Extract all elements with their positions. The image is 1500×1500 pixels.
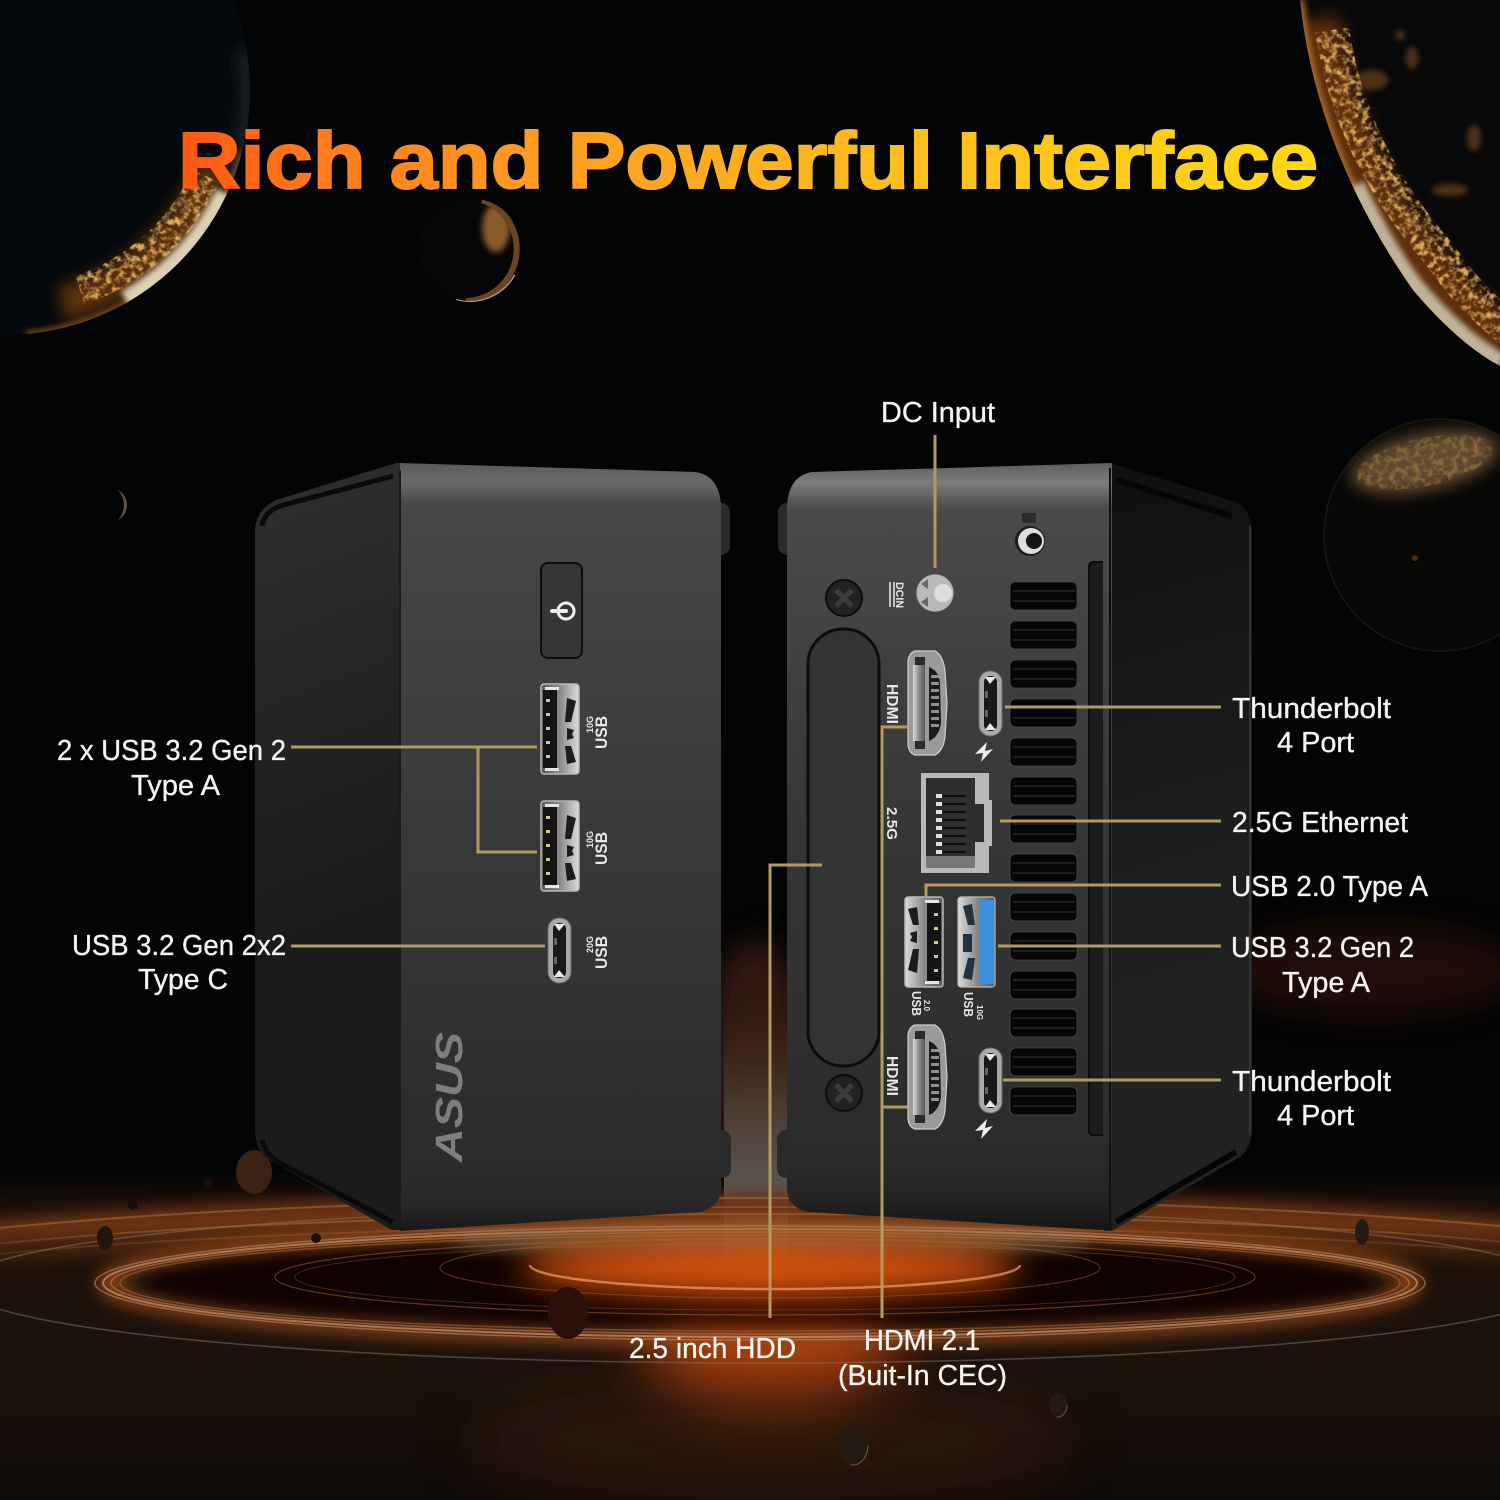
label: USB 3.2 Gen 2 Type A — [1231, 932, 1414, 999]
front face — [400, 463, 721, 1231]
DC IN marking: DCIN — [893, 582, 905, 608]
rear markings: HDMI — [883, 684, 900, 724]
label: Thunderbolt 4 Port (upper) — [1232, 693, 1391, 759]
label: HDMI 2.1 Built-In CEC: HDMI 2.1 — [864, 1325, 980, 1357]
Thunderbolt icons — [975, 742, 993, 1139]
side face — [255, 463, 402, 1230]
planet: dim lower right — [1220, 925, 1500, 1015]
connector lines — [291, 435, 1221, 1318]
label: 2.5 inch HDD: 2.5 inch HDD — [629, 1333, 796, 1365]
Ethernet port — [921, 773, 992, 873]
label: USB 3.2 Gen 2 Type A: USB 3.2 Gen 2 — [1231, 932, 1414, 964]
USB port markings — [585, 716, 611, 969]
USB port markings: USB — [592, 832, 611, 865]
audio jack — [1015, 513, 1045, 556]
DC input jack — [916, 574, 954, 612]
rubber feet — [712, 503, 731, 1178]
horizon streaks — [0, 1183, 1500, 1266]
Thunderbolt ports — [979, 671, 1002, 1113]
HDMI ports — [908, 651, 947, 1129]
rear markings: USB — [909, 991, 924, 1016]
planet: faint small left — [118, 490, 127, 520]
side face — [1104, 463, 1252, 1231]
USB port markings: 10G — [585, 716, 595, 733]
device: left, front panel side — [255, 463, 731, 1231]
USB 2.0 port — [905, 897, 943, 987]
rear markings: 10G — [975, 1005, 984, 1020]
planet: right — [1324, 419, 1500, 651]
label: USB 3.2 Gen 2 Type A: Type A — [1282, 967, 1371, 999]
rear markings: 2.5G — [883, 807, 900, 840]
USB 3.2 blue port — [958, 897, 995, 987]
floor glow — [0, 940, 1500, 1500]
orbit rings — [95, 1226, 1425, 1340]
label: 2.5G Ethernet: 2.5G Ethernet — [1232, 807, 1408, 839]
label: DC Input: DC Input — [881, 397, 995, 429]
label: Thunderbolt 4 Port (lower): 4 Port — [1277, 1100, 1354, 1132]
rubber feet — [777, 503, 796, 1178]
label: 2 x USB 3.2 Gen 2 Type A: Type A — [131, 770, 221, 802]
USB port markings: USB — [592, 936, 611, 969]
label: USB 3.2 Gen 2x2 Type C — [72, 930, 286, 996]
label: HDMI 2.1 Built-In CEC — [838, 1325, 1007, 1392]
vents — [1010, 582, 1077, 1115]
small planets along the orbit — [97, 1150, 1369, 1465]
label: 2 x USB 3.2 Gen 2 Type A: 2 x USB 3.2 Gen 2 — [57, 735, 286, 767]
power button — [541, 563, 582, 658]
rear markings: 2.0 — [922, 1000, 931, 1012]
USB port markings: 10G — [585, 831, 595, 848]
label: HDMI 2.1 Built-In CEC: (Buit-In CEC) — [838, 1360, 1007, 1392]
planet: top right — [1300, 0, 1500, 366]
expansion slot edge — [1089, 562, 1103, 1135]
device: right, rear panel side — [777, 463, 1252, 1231]
USB-A ports — [541, 684, 579, 891]
label: Thunderbolt 4 Port (lower) — [1232, 1066, 1391, 1132]
planet: small moon — [456, 200, 520, 302]
label: USB 2.0 Type A: USB 2.0 Type A — [1231, 871, 1429, 903]
label: 2 x USB 3.2 Gen 2 Type A — [57, 735, 286, 802]
USB-C port — [548, 918, 571, 983]
label: USB 3.2 Gen 2x2 Type C: USB 3.2 Gen 2x2 — [72, 930, 286, 962]
HDD door — [808, 629, 879, 1066]
label: Thunderbolt 4 Port (upper): Thunderbolt — [1232, 693, 1391, 725]
screws — [826, 580, 862, 1111]
USB port markings: USB — [592, 716, 611, 749]
label: Thunderbolt 4 Port (lower): Thunderbolt — [1232, 1066, 1391, 1098]
rear markings: USB — [961, 992, 976, 1017]
outer thin ring — [0, 1207, 1500, 1363]
USB port markings: 20G — [585, 936, 595, 953]
rear markings: HDMI — [883, 1056, 900, 1096]
label: USB 3.2 Gen 2x2 Type C: Type C — [138, 964, 228, 996]
label: Thunderbolt 4 Port (upper): 4 Port — [1277, 727, 1354, 759]
rear face — [787, 463, 1112, 1230]
planet: top left — [22, 41, 250, 334]
rear markings — [883, 684, 984, 1096]
ASUS logo: ASUS — [429, 1032, 471, 1163]
title: Rich and Powerful Interface — [178, 116, 1318, 205]
